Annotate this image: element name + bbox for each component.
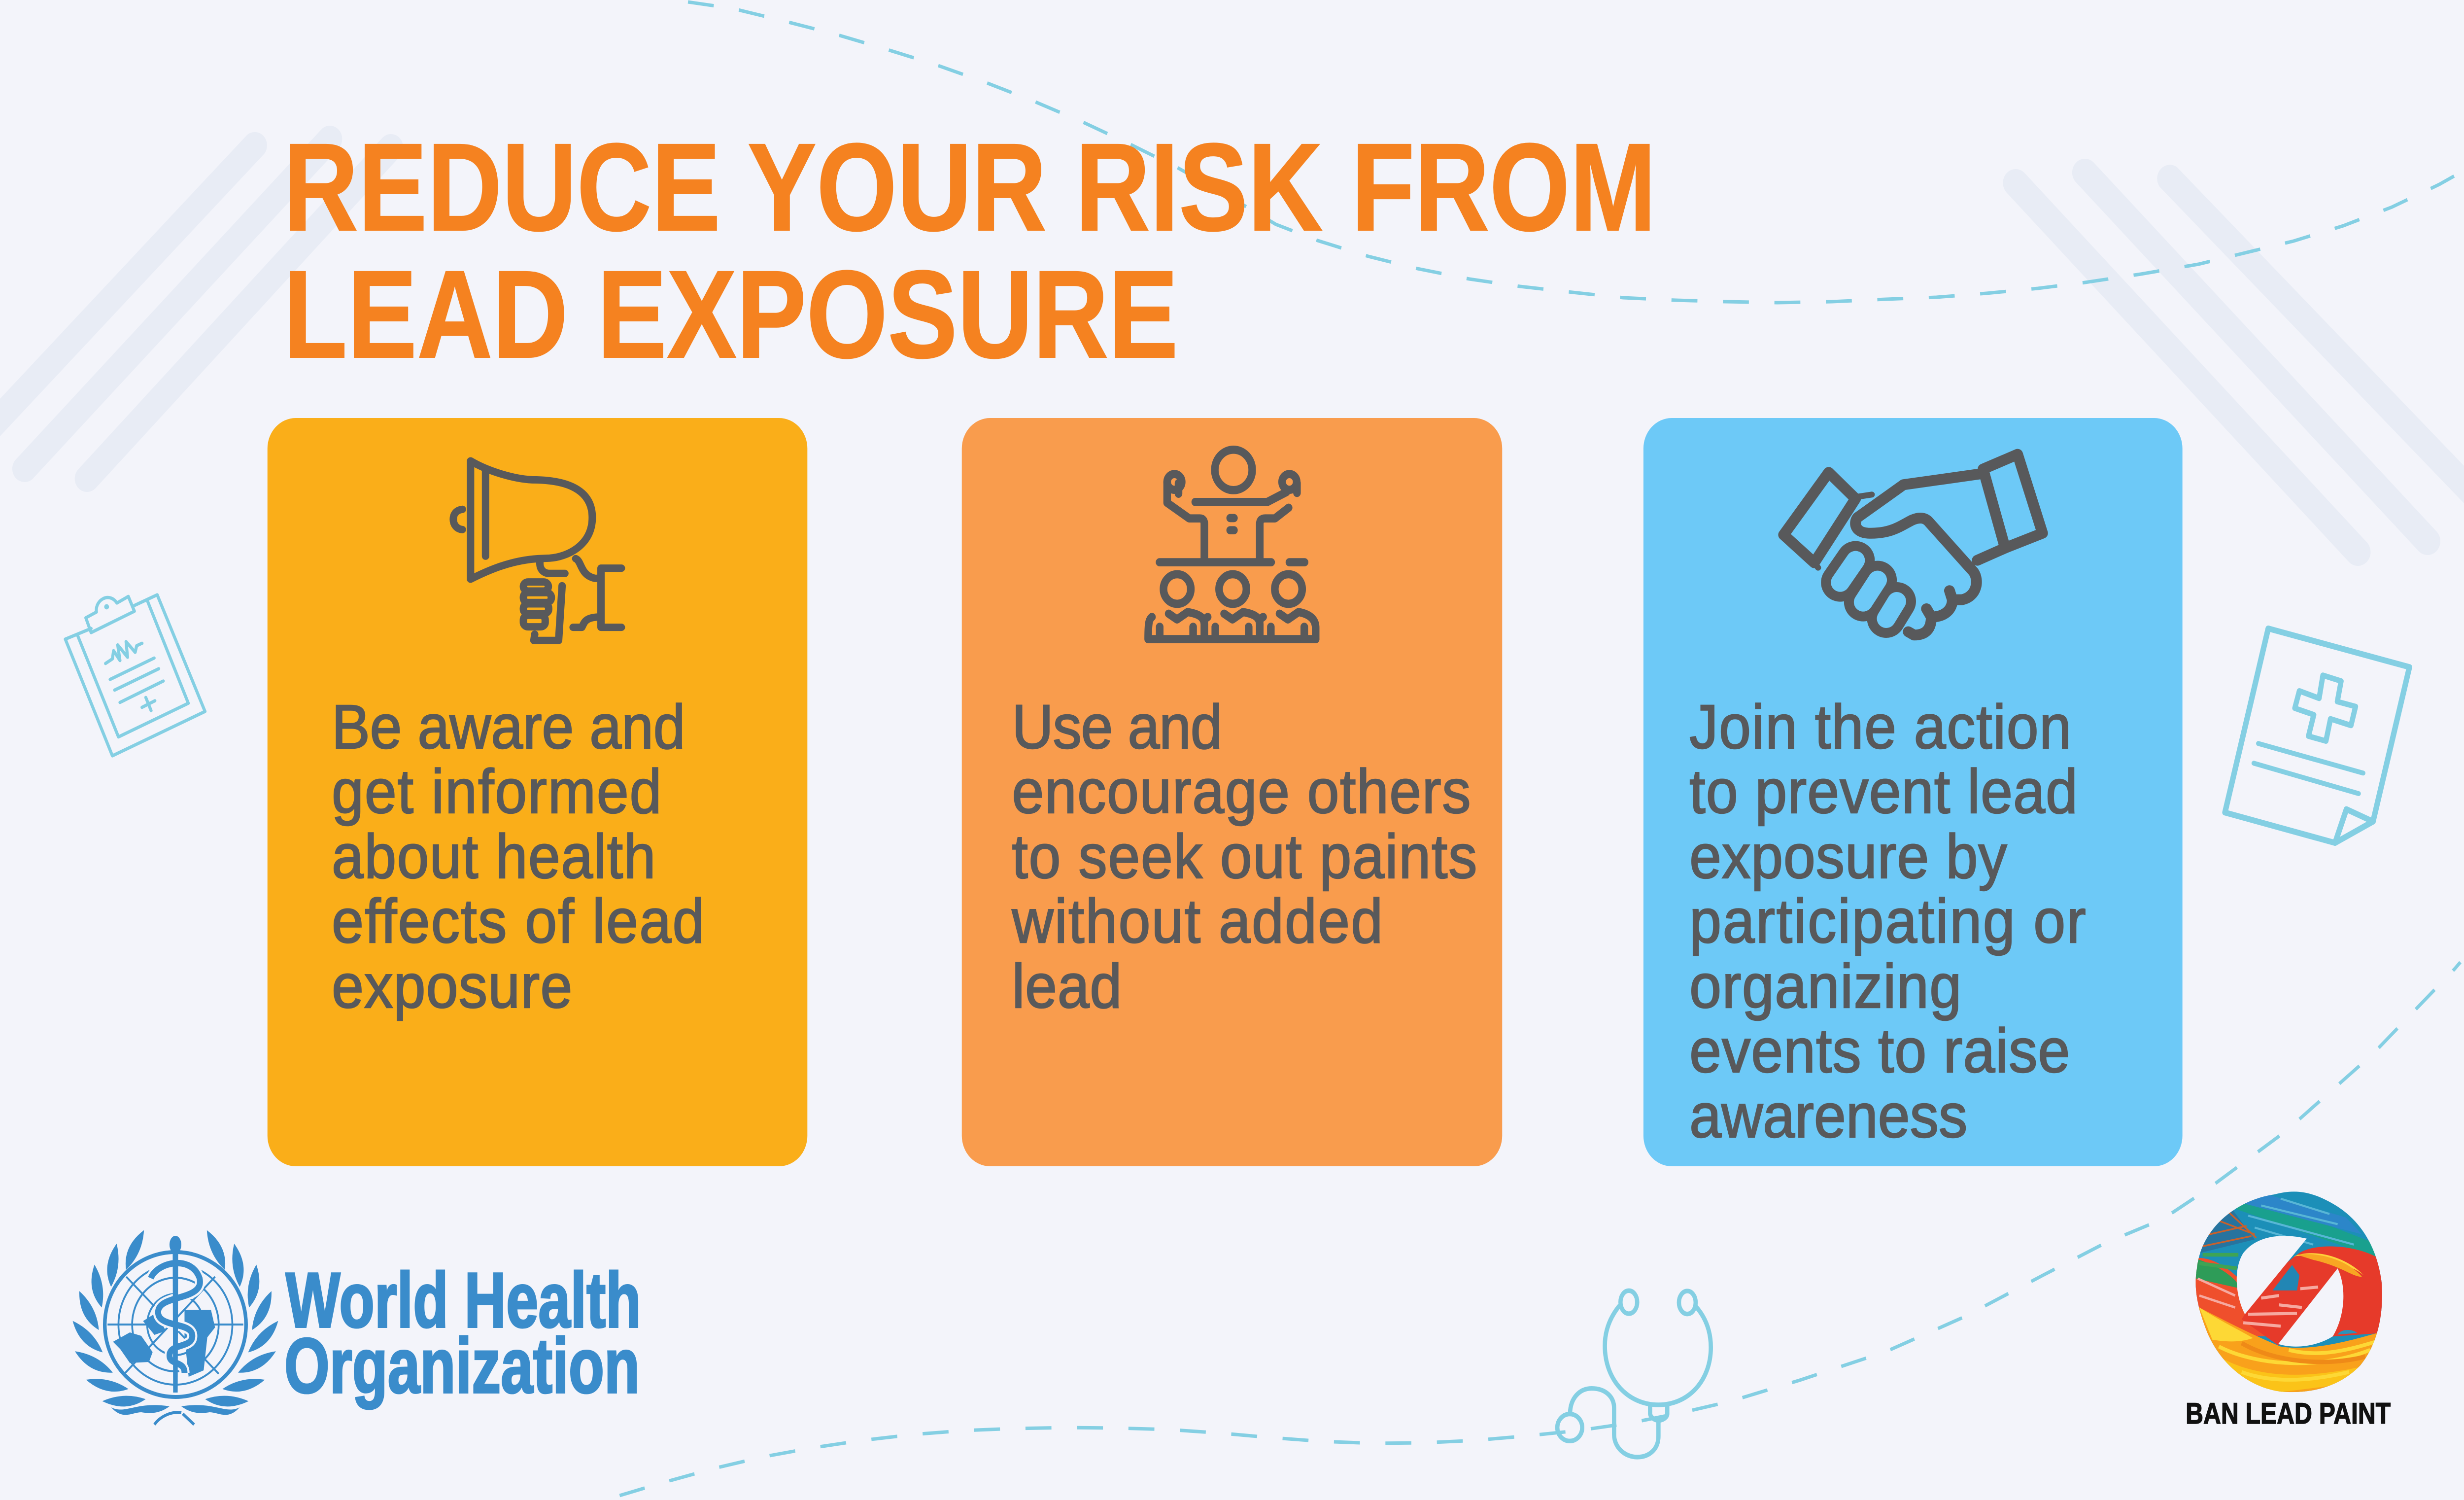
icon: clipboard	[66, 595, 205, 756]
icon: medical document	[2225, 628, 2409, 843]
title: LEAD EXPOSURE	[283, 244, 1178, 384]
wordmark: World Health Organization	[284, 1257, 641, 1409]
text: join the action: to prevent lead	[1689, 757, 2078, 826]
text: join the action: participating or	[1689, 886, 2086, 956]
text: join the action: awareness	[1689, 1081, 1967, 1151]
logo: Ban Lead Paint	[2186, 1190, 2391, 1430]
dashed line: bottom	[619, 962, 2461, 1496]
text: be aware: Be aware and	[332, 692, 685, 762]
background diagonal stripes: left	[0, 132, 391, 479]
text: join the action: exposure by	[1689, 822, 2007, 891]
icon: speaker and audience	[1148, 450, 1316, 639]
emblem: painted ring	[2194, 1190, 2385, 1394]
panel: be aware	[268, 418, 807, 1166]
text: use paints: lead	[1012, 951, 1122, 1021]
text: join the action: events to raise	[1689, 1016, 2070, 1085]
wordmark: World Health Organization: World Health	[286, 1257, 641, 1344]
text: use paints: to seek out paints	[1012, 822, 1477, 891]
icon: stethoscope	[1557, 1291, 1711, 1457]
text: be aware: about health	[332, 822, 655, 891]
icon: handshake	[1783, 454, 2043, 635]
text: be aware: exposure	[332, 951, 572, 1021]
panel: join the action	[1643, 418, 2183, 1166]
wordmark: Ban Lead Paint: BAN LEAD PAINT	[2186, 1397, 2391, 1430]
wordmark: World Health Organization: Organization	[284, 1323, 640, 1409]
text: use paints: without added	[1011, 886, 1383, 956]
emblem: WHO	[72, 1230, 278, 1425]
text: be aware: effects of lead	[332, 886, 704, 956]
background diagonal stripes: right	[2016, 165, 2464, 552]
logo: World Health Organization	[72, 1230, 641, 1425]
dashed line: top	[688, 2, 2461, 303]
icon: megaphone in hand	[453, 461, 621, 640]
text: use paints: encourage others	[1012, 757, 1471, 826]
title	[283, 117, 1656, 384]
panel: use lead-free paint	[962, 418, 1502, 1166]
text: use paints: Use and	[1012, 692, 1223, 762]
title: REDUCE YOUR RISK FROM	[283, 117, 1656, 257]
text: be aware: get informed	[332, 757, 661, 826]
text: join the action: organizing	[1689, 951, 1961, 1021]
text: join the action: Join the action	[1689, 692, 2071, 762]
